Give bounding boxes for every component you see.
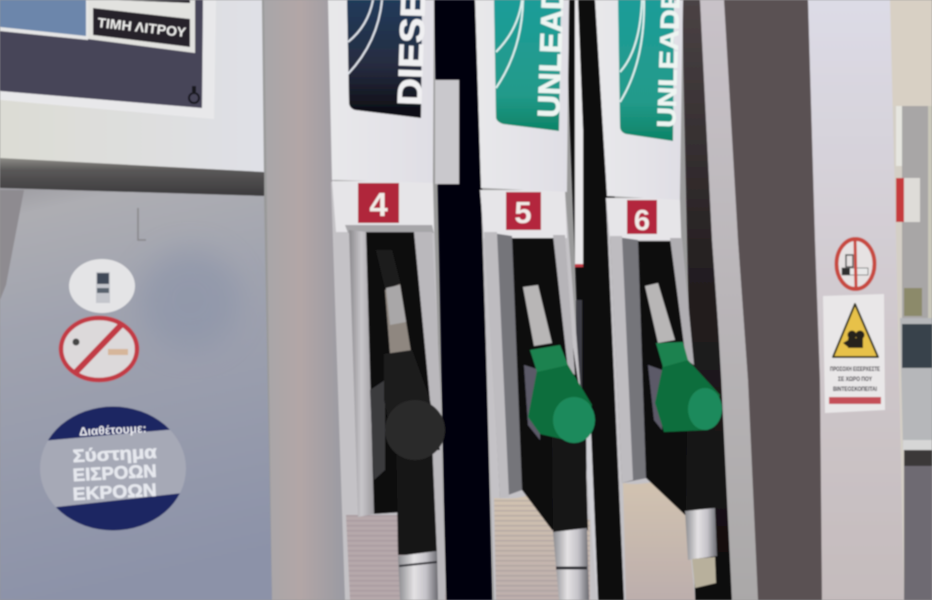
nozzle bay 5: unleaded bbox=[475, 0, 597, 600]
metal ferrule bbox=[553, 528, 589, 600]
price label: ΤΙΜΗ ΛΙΤΡΟΥ bbox=[97, 15, 187, 40]
blue screen bbox=[0, 0, 88, 40]
sticker: small white label bbox=[69, 259, 135, 313]
lock icon bbox=[189, 86, 199, 103]
hose bbox=[376, 250, 402, 292]
sticker: input-output system: Σύστημα bbox=[72, 442, 157, 466]
lower body bbox=[331, 182, 446, 600]
metal ferrule bbox=[685, 508, 717, 588]
black handle bbox=[686, 428, 716, 510]
white fuel board bbox=[328, 0, 434, 183]
white fuel board bbox=[475, 0, 569, 192]
sticker: input-output system: ΕΚΡΟΩΝ bbox=[72, 480, 157, 504]
metal holster bbox=[345, 225, 434, 233]
right pillar bbox=[682, 0, 904, 600]
number badge 6: 6 bbox=[634, 205, 650, 237]
nozzle bay 4: diesel bbox=[328, 0, 446, 600]
number badge 5 bbox=[506, 192, 541, 230]
silver hose bbox=[645, 283, 675, 343]
number badge 5: 5 bbox=[514, 195, 532, 230]
unleaded decal bbox=[618, 0, 687, 141]
number badge 4 bbox=[358, 183, 399, 223]
warning text: ΠΡΟΣΟΧΗ ΕΙΣΕΡΧΕΣΤΕ bbox=[830, 366, 880, 373]
number badge 6 bbox=[627, 200, 657, 237]
payment terminal housing bbox=[0, 0, 264, 196]
diesel decal bbox=[347, 0, 434, 118]
display panel bbox=[0, 0, 203, 108]
warning text bbox=[830, 366, 880, 393]
sticker: no smoking right bbox=[836, 239, 874, 289]
warning text: ΣΕ ΧΩΡΟ ΠΟΥ bbox=[838, 376, 872, 383]
left central column bbox=[264, 0, 345, 600]
metal holster bbox=[485, 232, 522, 498]
black handle bbox=[552, 430, 587, 532]
sign: CCTV warning bbox=[823, 294, 885, 413]
unleaded decal bbox=[494, 0, 572, 131]
black nozzle bbox=[384, 350, 445, 600]
icon: warning triangle with camera bbox=[833, 304, 878, 357]
sticker: input-output system: Διαθέτουμε: bbox=[79, 421, 147, 439]
sticker: input-output system bbox=[40, 406, 186, 532]
sticker: no smoking left bbox=[61, 318, 137, 380]
lower grey panel bbox=[0, 186, 272, 600]
sticker: input-output system: ΕΙΣΡΟΩΝ bbox=[72, 461, 157, 485]
white fuel board bbox=[595, 0, 683, 200]
white price card bbox=[88, 0, 195, 53]
metal ferrule bbox=[398, 551, 438, 600]
background: forecourt behind pump bbox=[880, 0, 932, 600]
green nozzle bbox=[528, 345, 595, 443]
metal holster bbox=[610, 236, 647, 483]
white number band bbox=[332, 181, 434, 232]
price label bbox=[93, 8, 190, 47]
number badge 4: 4 bbox=[369, 186, 388, 223]
warning text: ΒΙΝΤΕΟΣΚΟΠΕΙΤΑΙ bbox=[833, 386, 877, 393]
green nozzle bbox=[655, 342, 722, 432]
silver hose bbox=[523, 285, 552, 346]
gap between nozzle bays bbox=[434, 0, 625, 600]
nozzle bay 6: unleaded bbox=[595, 0, 722, 600]
